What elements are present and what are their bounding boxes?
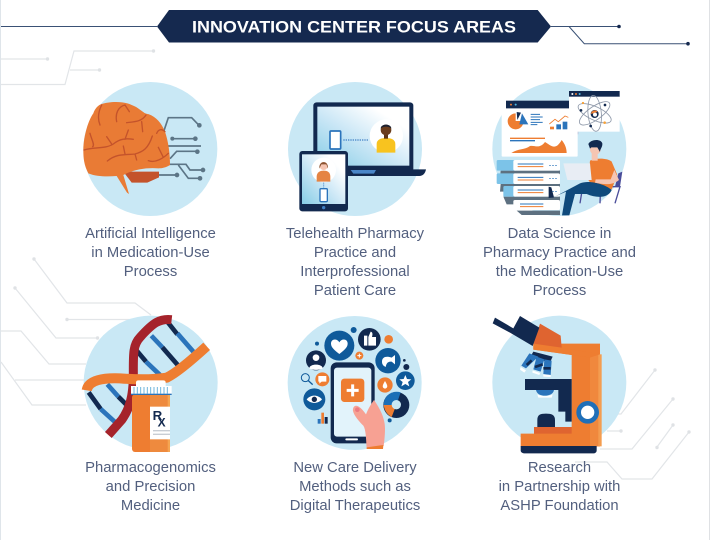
text: data science: Pharmacy Practice and xyxy=(483,245,636,261)
icon: DNA and pill bottle: R xyxy=(153,408,163,423)
text: artificial intelligence: in Medication-Use xyxy=(91,245,210,261)
icon: data science xyxy=(492,82,626,216)
background circuit lines right xyxy=(575,368,691,479)
text: new care delivery: New Care Delivery xyxy=(293,460,417,476)
text: research: in Partnership with xyxy=(499,479,620,495)
text: pharmacogenomics: Medicine xyxy=(121,498,180,514)
text: new care delivery: Methods such as xyxy=(299,479,411,495)
text: telehealth: Practice and xyxy=(314,245,396,261)
icon: brain with circuits xyxy=(83,82,217,216)
text: artificial intelligence: Process xyxy=(124,264,177,280)
text: data science: Process xyxy=(533,283,586,299)
text: new care delivery: Digital Therapeutics xyxy=(290,498,420,514)
icon: DNA and pill bottle xyxy=(84,316,218,452)
text: telehealth: Interprofessional xyxy=(300,264,410,280)
title banner xyxy=(1,10,690,46)
text: data science: Data Science in xyxy=(508,226,611,242)
text: research: ASHP Foundation xyxy=(500,498,619,514)
background circuit lines left xyxy=(1,257,151,405)
text: pharmacogenomics: Pharmacogenomics xyxy=(85,460,216,476)
text: data science: the Medication-Use xyxy=(496,264,623,280)
icon: digital health phone xyxy=(288,316,422,450)
text: telehealth: Patient Care xyxy=(314,283,396,299)
icon: microscope xyxy=(492,316,626,453)
text: artificial intelligence: Artificial Intelligence xyxy=(85,226,216,242)
icon: DNA and pill bottle: X xyxy=(158,415,166,429)
text: pharmacogenomics: and Precision xyxy=(106,479,195,495)
background circuit lines top left xyxy=(1,49,155,84)
text: telehealth: Telehealth Pharmacy xyxy=(286,226,424,242)
icon: telehealth devices xyxy=(288,82,426,216)
title banner: INNOVATION CENTER FOCUS AREAS xyxy=(192,18,516,36)
text: research: Research xyxy=(528,460,591,476)
